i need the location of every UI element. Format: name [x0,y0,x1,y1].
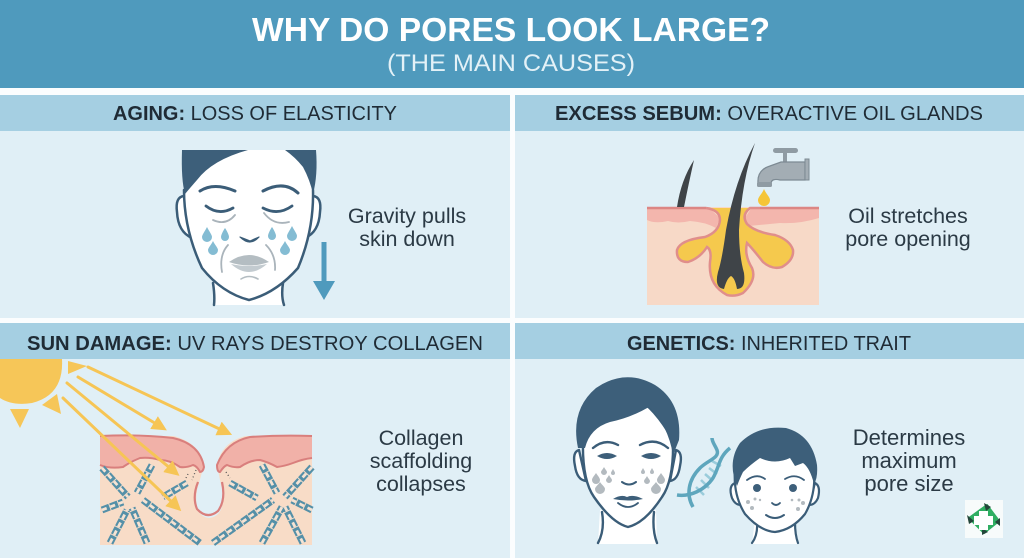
genetics caption: pore size [864,471,954,496]
collagen chains [102,465,312,543]
genetics caption: maximum [861,448,957,473]
icon: DNA helix [677,438,730,507]
aging heading: AGING: LOSS OF ELASTICITY [113,103,397,125]
aging caption [348,204,466,251]
sun caption: scaffolding [370,449,472,473]
arrow: gravity [313,242,335,300]
sun caption: collapses [376,472,466,496]
UV ray arrows [63,367,228,508]
sebum caption [845,204,971,251]
panel: genetics [515,323,1024,558]
aging caption: Gravity pulls [348,204,466,228]
panel: excess sebum [515,95,1024,318]
sebum caption: pore opening [845,227,971,251]
genetics heading: GENETICS: INHERITED TRAIT [627,333,911,355]
pore droplets [202,226,297,255]
skin cross-section [100,435,312,545]
sun caption [370,426,472,496]
logo badge [965,500,1003,538]
icon: aging face [177,150,320,305]
panel: sun damage [0,323,510,558]
title: WHY DO PORES LOOK LARGE? [252,11,770,48]
sun caption: Collagen [379,426,463,450]
sebum heading: EXCESS SEBUM: OVERACTIVE OIL GLANDS [555,103,983,125]
icon: adult face [574,377,681,544]
header banner [0,0,1024,88]
oil drop [758,189,770,206]
child pores [746,498,805,511]
genetics caption: Determines [853,425,965,450]
subtitle: (THE MAIN CAUSES) [387,50,635,77]
icon: faucet [757,148,809,206]
sun heading: SUN DAMAGE: UV RAYS DESTROY COLLAGEN [27,333,483,355]
skin cross-section [647,207,819,305]
hair [677,143,755,289]
panel: aging [0,95,510,318]
genetics caption [853,425,965,496]
sebum caption: Oil stretches [848,204,968,228]
icon: child face [731,428,819,544]
aging caption: skin down [359,227,455,251]
icon: sun [0,359,87,428]
adult pores [592,467,665,494]
